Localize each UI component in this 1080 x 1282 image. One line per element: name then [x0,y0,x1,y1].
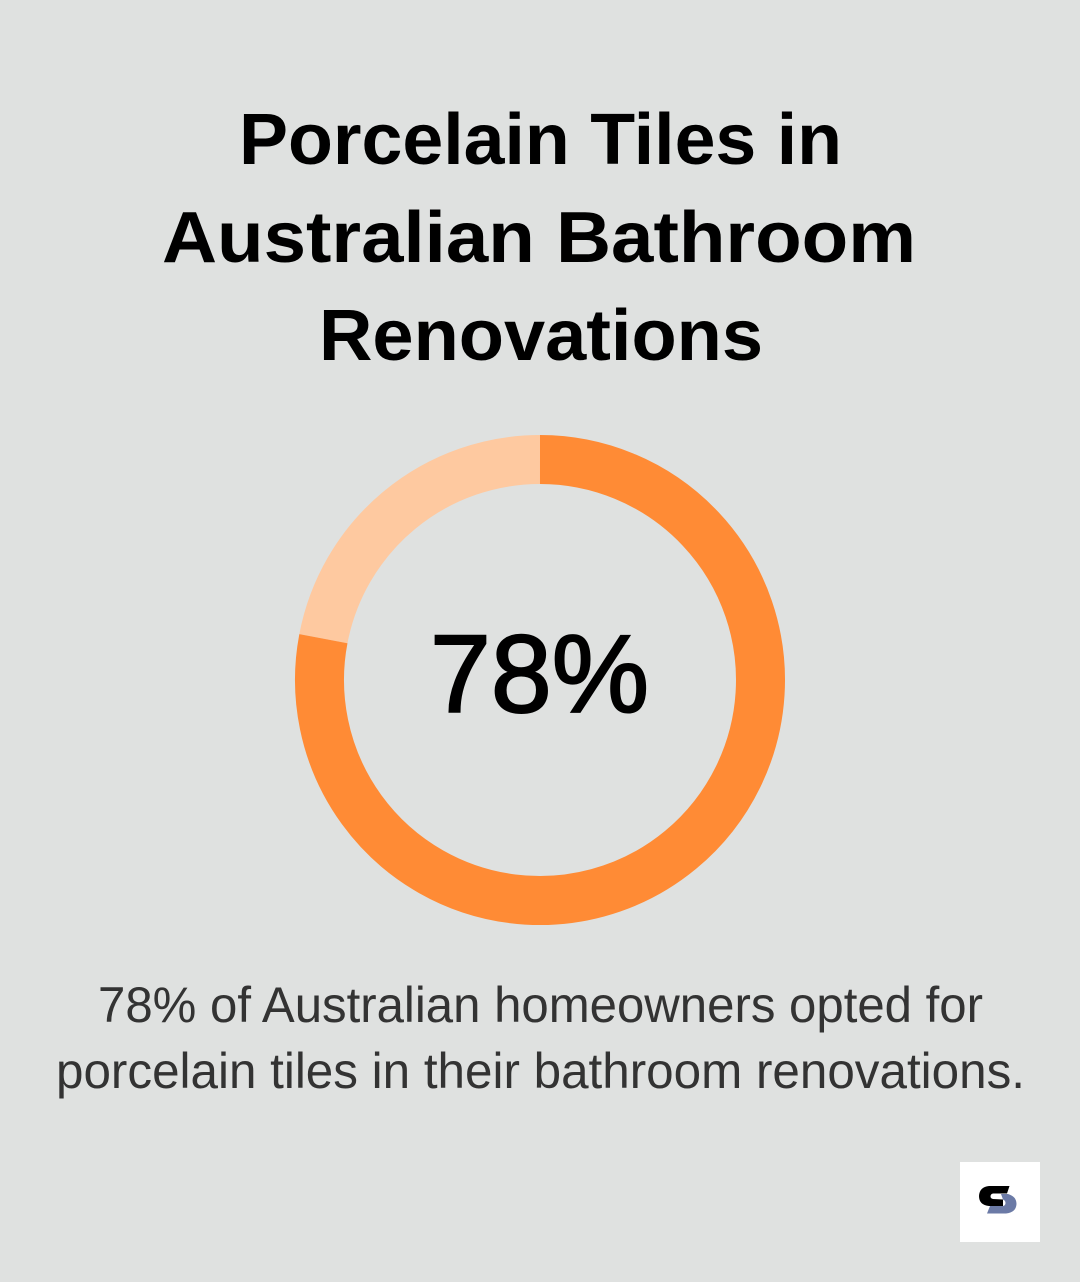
logo mark: upper black part [979,1186,1010,1206]
title [162,100,916,376]
logo background [960,1162,1040,1242]
donut remainder segment [323,460,540,639]
logo badge [960,1162,1040,1242]
title: Australian Bathroom [162,198,916,278]
description text: porcelain tiles in their bathroom renovations. [56,1043,1025,1099]
title: Porcelain Tiles in [239,100,842,180]
donut 78 percent segment [319,460,760,901]
description text: 78% of Australian homeowners opted for [98,977,983,1033]
donut centre value: 78% [430,613,649,736]
title: Renovations [319,296,763,376]
donut chart: 78 percent [319,460,760,901]
description text [56,977,1025,1099]
logo mark: lower blue part [987,1194,1016,1214]
